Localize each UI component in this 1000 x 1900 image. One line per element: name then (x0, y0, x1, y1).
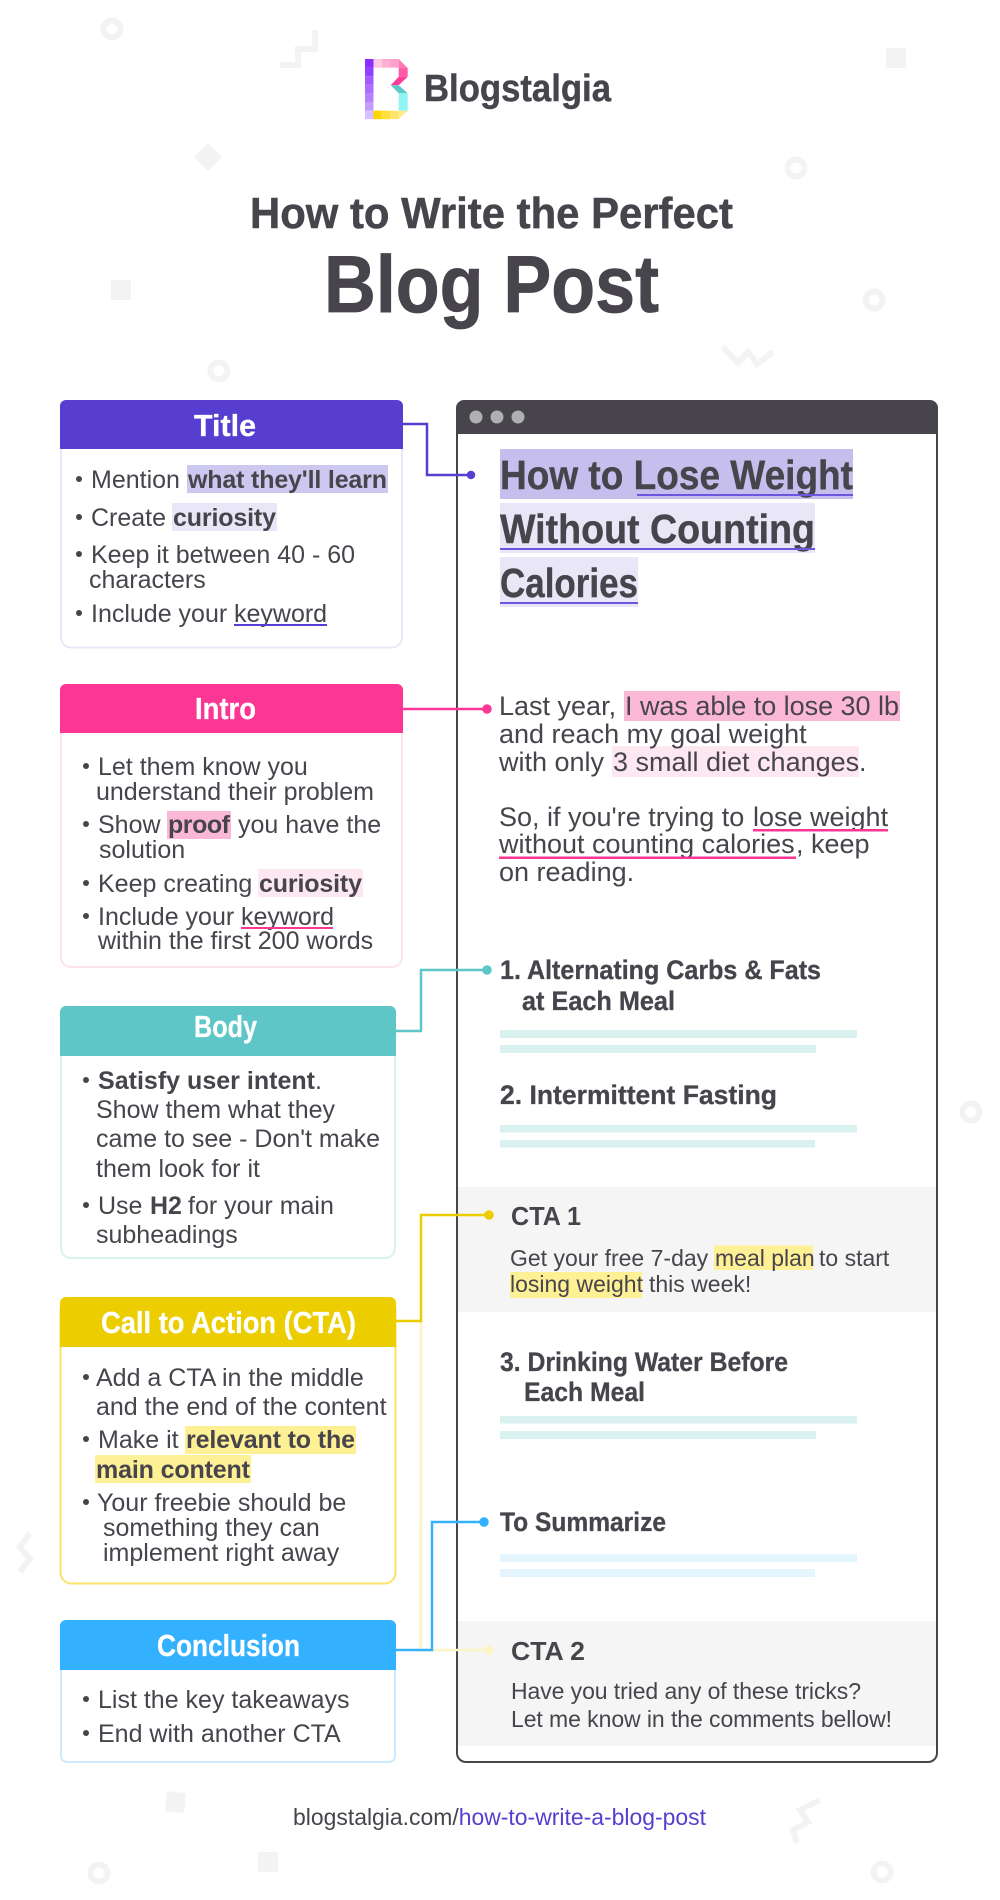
CTA bullet list (83, 1364, 387, 1567)
subheading 3 and text lines: Each Meal (524, 1377, 645, 1407)
connector: Conclusion to summary (396, 1518, 488, 1650)
Conclusion bullet list: End with another CTA (98, 1720, 341, 1748)
Body bullet list: H2 (150, 1192, 182, 1220)
panel: Conclusion (60, 1620, 396, 1762)
Conclusion header: Conclusion (157, 1628, 300, 1663)
panel: CTA 1: Get your free 7-day (510, 1245, 709, 1271)
Body bullet list: came to see - Don't make (96, 1125, 380, 1153)
Intro bullet list: solution (99, 836, 185, 864)
CTA bullet list: implement right away (103, 1539, 340, 1567)
footer URL: blogstalgia.com/how-to-write-a-blog-post (293, 1804, 707, 1830)
panel: browser window (456, 400, 938, 1762)
blog post intro text: Last year, (499, 691, 616, 721)
blog post intro text: So, if you're trying to (499, 802, 744, 832)
Body bullet list: them look for it (96, 1155, 260, 1183)
browser top bar (456, 400, 938, 434)
Intro bullet list (83, 753, 381, 955)
blog post intro text: with only (498, 747, 605, 777)
Intro bullet list: curiosity (259, 870, 362, 898)
CTA bullet list: main content (96, 1456, 251, 1484)
browser window dots (470, 410, 524, 424)
subheading 1 and text lines (500, 955, 857, 1053)
Body bullet list: subheadings (96, 1221, 238, 1249)
blog post intro text: 3 small diet changes (613, 747, 859, 777)
Body bullet list: . (315, 1067, 322, 1095)
CTA bullet list: Your freebie should be (97, 1489, 346, 1517)
blog post intro text: on reading. (499, 857, 634, 887)
blog post intro text (498, 691, 900, 887)
Intro bullet list: understand their problem (96, 778, 374, 806)
Intro bullet list: Show (98, 811, 161, 839)
Conclusion bullet list: List the key takeaways (98, 1686, 350, 1714)
Body header: Body (194, 1009, 258, 1044)
blog post title: Calories (500, 560, 638, 606)
Title bullet list: Keep it between 40 - 60 (91, 541, 355, 569)
panel: CTA 2: Have you tried any of these tricks? (511, 1678, 861, 1704)
Title bullet list: keyword (234, 600, 327, 628)
blog post intro text: , keep (796, 829, 870, 859)
title (250, 189, 733, 330)
Title bullet list: curiosity (173, 504, 276, 532)
CTA bullet list: Make it (98, 1426, 179, 1454)
connector: Intro to blog intro (403, 706, 490, 712)
Body header (60, 1006, 396, 1056)
Body bullet list (83, 1067, 380, 1249)
Title bullet list: Mention (91, 466, 180, 494)
panel: CTA 2 (458, 1621, 936, 1746)
panel: CTA 2: Let me know in the comments bellow! (511, 1706, 892, 1732)
Title header (60, 400, 403, 449)
Intro bullet list: within the first 200 words (97, 927, 373, 955)
Intro bullet list: proof (168, 811, 231, 839)
panel: CTA 1: to start (819, 1245, 890, 1271)
connector: CTA to CTA 1 (396, 1212, 492, 1321)
panel: CTA 1: CTA 1 (511, 1201, 581, 1231)
connector: Body to subheadings (396, 966, 490, 1031)
title line 2: Blog Post (324, 240, 659, 330)
summary heading and text lines: To Summarize (500, 1507, 666, 1537)
summary heading and text lines (500, 1507, 857, 1577)
CTA bullet list: relevant to the (186, 1426, 355, 1454)
Intro bullet list: keyword (241, 903, 334, 931)
CTA bullet list: Add a CTA in the middle (96, 1364, 364, 1392)
subheading 1 and text lines: at Each Meal (522, 986, 675, 1016)
Intro header (60, 684, 403, 733)
Intro bullet list: Include your (98, 903, 234, 931)
subheading 3 and text lines (500, 1347, 857, 1439)
blog post title: Without Counting (500, 506, 815, 552)
subheading 2 and text lines: 2. Intermittent Fasting (500, 1080, 777, 1110)
panel: CTA 1: losing weight (510, 1271, 644, 1297)
panel: CTA 1: this week! (649, 1271, 751, 1297)
panel: Title (60, 400, 403, 648)
connector: Title to blog title (403, 424, 474, 478)
Title header: Title (194, 408, 256, 443)
CTA header: Call to Action (CTA) (101, 1305, 356, 1340)
subheading 3 and text lines: 3. Drinking Water Before (500, 1347, 788, 1377)
panel: CTA 1: meal plan (715, 1245, 815, 1271)
CTA bullet list: and the end of the content (96, 1393, 387, 1421)
blog post intro text: . (859, 747, 867, 777)
CTA bullet list: something they can (103, 1514, 320, 1542)
blog post intro text: without counting calories (498, 829, 795, 859)
Body bullet list: Show them what they (96, 1096, 336, 1124)
blog post intro text: lose weight (753, 802, 889, 832)
Title bullet list: what they'll learn (187, 466, 387, 494)
Conclusion bullet list (83, 1686, 350, 1748)
blog post title: How to Lose Weight (500, 452, 853, 498)
panel: Intro (60, 684, 403, 967)
icon: pixel letter B (365, 59, 408, 119)
CTA header (60, 1297, 396, 1347)
subheading 2 and text lines (500, 1080, 857, 1148)
panel: CTA 1 (458, 1187, 936, 1312)
blog post intro text: and reach my goal weight (499, 719, 807, 749)
Conclusion header (60, 1620, 396, 1670)
Body bullet list: for your main (188, 1192, 334, 1220)
Intro bullet list: you have the (238, 811, 381, 839)
Title bullet list (76, 465, 388, 628)
Title bullet list: characters (89, 566, 206, 594)
Body bullet list: Use (98, 1192, 142, 1220)
logo wordmark: Blogstalgia (424, 68, 612, 110)
Title bullet list: Create (91, 504, 166, 532)
Intro bullet list: Keep creating (98, 870, 252, 898)
panel: Body (60, 1006, 396, 1258)
connector: CTA to CTA 2 (pale) (421, 1321, 492, 1654)
blog post intro text: I was able to lose 30 lb (625, 691, 899, 721)
blog post title (500, 449, 853, 607)
title line 1: How to Write the Perfect (250, 189, 733, 238)
Intro bullet list: Let them know you (98, 753, 308, 781)
logo: Blogstalgia (365, 59, 612, 119)
Title bullet list: Include your (91, 600, 227, 628)
panel: Call to Action (60, 1297, 396, 1584)
panel: CTA 2: CTA 2 (511, 1636, 585, 1666)
Body bullet list: Satisfy user intent (98, 1067, 316, 1095)
subheading 1 and text lines: 1. Alternating Carbs & Fats (500, 955, 821, 985)
Intro header: Intro (195, 691, 256, 726)
